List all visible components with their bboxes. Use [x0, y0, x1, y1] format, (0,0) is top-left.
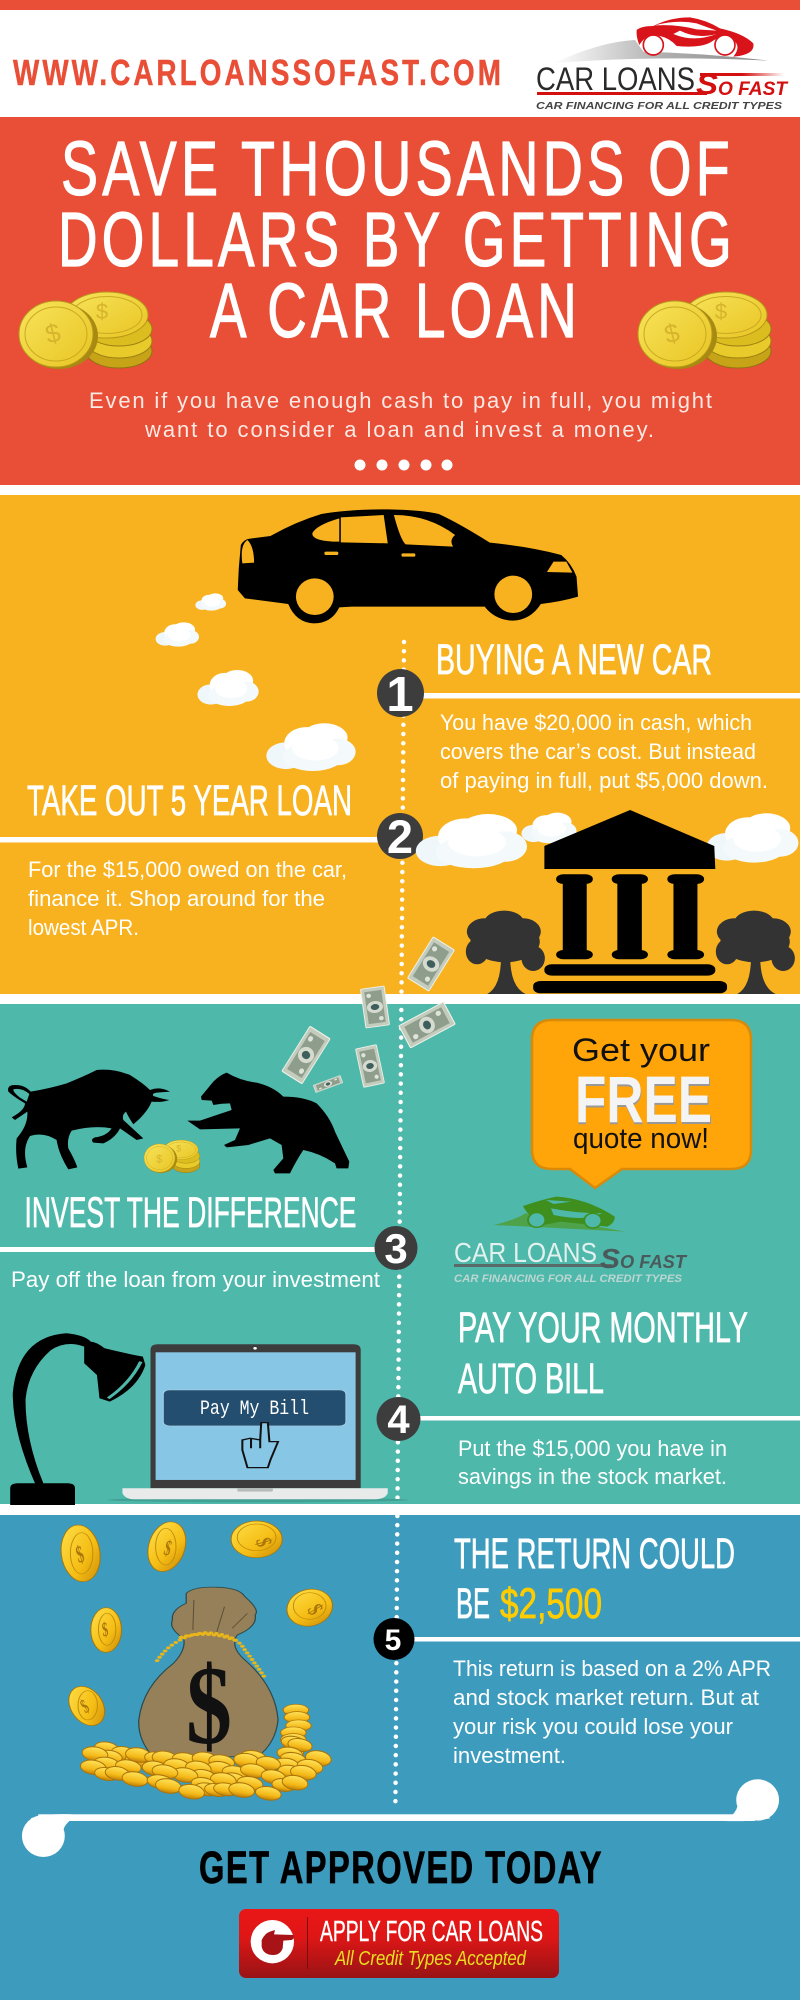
body text: covers the car’s cost. But instead — [440, 739, 756, 764]
logo: Car Loans So Fast — [536, 17, 788, 112]
header website url: WWW.CARLOANSSOFAST.COM — [13, 52, 504, 93]
icon: exhaust clouds — [156, 593, 356, 771]
coin column — [278, 1704, 311, 1758]
rule — [0, 837, 400, 842]
logo: green variant: CAR FINANCING FOR ALL CREDIT TYPES — [454, 1273, 683, 1285]
body text — [453, 1656, 771, 1768]
rule — [0, 1247, 396, 1252]
icon: gold coins right — [638, 292, 771, 369]
icon: bull and bear — [8, 1070, 349, 1173]
button: apply for car loans — [239, 1909, 559, 1978]
body text: This return is based on a 2% APR — [453, 1656, 771, 1681]
callout: free quote: FREE — [575, 1064, 713, 1138]
flying coins — [58, 1520, 338, 1728]
bull — [8, 1070, 170, 1169]
body text — [28, 857, 347, 940]
coin dollar marks: $ — [76, 1695, 93, 1718]
icon: lamp — [10, 1333, 145, 1505]
title: A CAR LOAN — [210, 268, 581, 354]
logo car — [553, 17, 768, 63]
heading: AUTO BILL — [458, 1355, 604, 1403]
step 3 — [0, 1189, 418, 1292]
logo: green variant: S — [600, 1243, 620, 1274]
body text: savings in the stock market. — [458, 1464, 727, 1489]
rule — [400, 693, 800, 698]
heading: INVEST THE DIFFERENCE — [24, 1189, 356, 1237]
step number 3: 3 — [384, 1225, 408, 1272]
step number 5 — [374, 1618, 414, 1660]
body text: For the $15,000 owed on the car, — [28, 857, 347, 882]
body text: your risk you could lose your — [453, 1714, 733, 1739]
step 2 — [0, 777, 423, 940]
icon: money bag with coins — [58, 1520, 338, 1802]
rule — [400, 1637, 800, 1642]
closing heading: GET APPROVED TODAY — [199, 1842, 603, 1893]
body text: finance it. Shop around for the — [28, 886, 325, 911]
body text: You have $20,000 in cash, which — [440, 710, 752, 735]
bag — [139, 1587, 278, 1757]
icon: gold coins left — [19, 292, 152, 369]
step 5 — [374, 1530, 800, 1768]
body text — [458, 1436, 727, 1489]
rule — [400, 1416, 800, 1420]
button: apply for car loans: APPLY FOR CAR LOANS — [320, 1916, 543, 1948]
coin pile — [79, 1735, 332, 1802]
icon: falling money — [282, 937, 455, 1093]
body text: of paying in full, put $5,000 down. — [440, 768, 768, 793]
step number 2: 2 — [387, 810, 413, 863]
step number 4 — [376, 1397, 420, 1442]
icon: gold coins right: $ — [661, 317, 683, 350]
heading: TAKE OUT 5 YEAR LOAN — [27, 777, 352, 825]
icon: bank with clouds and trees — [416, 810, 798, 994]
callout: free quote — [532, 1020, 751, 1188]
bear — [187, 1073, 349, 1173]
panel: teal section background — [0, 1004, 800, 1504]
step number 5: 5 — [385, 1624, 401, 1657]
icon: gold coins right: $ — [715, 299, 727, 324]
step number 3 — [374, 1225, 418, 1272]
heading — [458, 1304, 748, 1403]
logo: green variant: O FAST — [620, 1252, 688, 1272]
step number 4: 4 — [387, 1398, 410, 1442]
body text: Put the $15,000 you have in — [458, 1436, 727, 1461]
step number 1: 1 — [386, 668, 414, 722]
logo: Car Loans So Fast: S — [696, 69, 719, 101]
callout: free quote: FREE — [575, 1062, 712, 1136]
coin dollar marks — [73, 1535, 327, 1718]
coin dollar marks: $ — [73, 1541, 87, 1569]
button: apply for car loans: All Credit Types Accepted — [334, 1948, 527, 1970]
body text: investment. — [453, 1743, 566, 1768]
body text — [440, 710, 768, 793]
icon: black car — [238, 509, 578, 623]
intro text: Even if you have enough cash to pay in full, you might — [89, 388, 712, 413]
body text: Pay off the loan from your investment — [11, 1267, 380, 1292]
step number 2 — [377, 810, 423, 863]
logo: Car Loans So Fast: CAR FINANCING FOR ALL CREDIT TYPES — [536, 100, 782, 112]
coin dollar marks: $ — [100, 1618, 110, 1641]
body text: and stock market return. But at — [453, 1685, 759, 1710]
icon: gold coins left: $ — [42, 317, 64, 350]
icon: laptop with pay my bill button — [107, 1344, 408, 1502]
icon: small coins — [144, 1140, 200, 1173]
heading: BE — [456, 1580, 490, 1628]
coin dollar marks: $ — [302, 1600, 327, 1620]
heading: $2,500 — [500, 1580, 602, 1628]
intro text — [89, 388, 712, 442]
logo car green — [494, 1197, 625, 1232]
step 4 — [376, 1304, 800, 1489]
callout: free quote: Get your — [572, 1032, 710, 1068]
icon: small coins: $ — [156, 1153, 162, 1165]
coin dollar marks: $ — [250, 1535, 276, 1550]
body text: lowest APR. — [28, 915, 139, 940]
pagination dots — [354, 460, 452, 470]
icon: small coins: $ — [176, 1144, 182, 1154]
panel: hero — [0, 117, 800, 485]
icon: hand cursor — [242, 1423, 278, 1468]
icon: pointing hand — [251, 1920, 294, 1963]
top red strip — [0, 0, 800, 10]
ribbon divider — [22, 1779, 779, 1857]
dotted timeline — [395, 642, 404, 1808]
dollar sign: $ — [186, 1644, 232, 1768]
logo: green variant — [454, 1197, 688, 1285]
callout: free quote: quote now! — [573, 1123, 709, 1155]
title — [58, 126, 736, 354]
logo wordmark: CAR LOANS — [536, 61, 695, 97]
intro text: want to consider a loan and invest a money. — [144, 417, 654, 442]
step 1 — [377, 636, 800, 793]
icon: gold coins left: $ — [96, 299, 108, 324]
coin dollar marks: $ — [162, 1535, 174, 1561]
heading — [454, 1530, 735, 1628]
logo wordmark: CAR LOANS — [454, 1237, 597, 1268]
panel: blue section background — [0, 1515, 800, 2000]
logo: Car Loans So Fast: O FAST — [718, 79, 788, 100]
step number 1 — [377, 668, 424, 722]
icon: laptop with pay my bill button: Pay My Bill — [200, 1398, 309, 1421]
panel: yellow section background — [0, 495, 800, 994]
